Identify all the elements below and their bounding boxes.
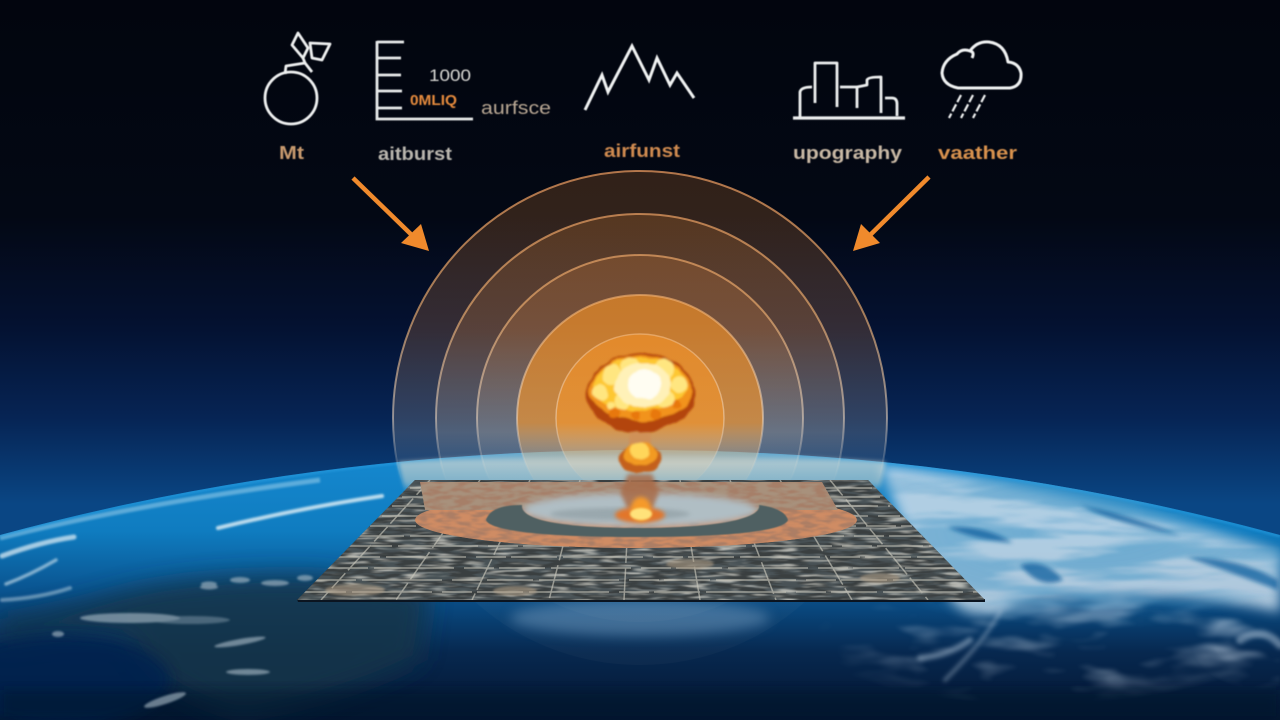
city map plane	[290, 478, 990, 602]
arrow: right, pointing to blast	[853, 177, 929, 251]
ring 3	[477, 255, 803, 581]
haze under map	[510, 600, 770, 636]
label: weather: vaather	[938, 143, 1017, 163]
damage zone: debris area	[415, 482, 857, 548]
icon: city skyline	[793, 63, 905, 118]
cloud mass, right	[880, 465, 1280, 614]
upper stem	[629, 427, 651, 445]
scale label: surface: aurfsce	[481, 98, 551, 118]
ring 2	[436, 214, 844, 622]
map edge	[297, 599, 985, 602]
cloud streaks, left	[2, 496, 382, 600]
icon: height scale	[377, 41, 473, 119]
street grid	[300, 480, 985, 600]
land mass, left	[0, 575, 430, 715]
label: Mt: Mt	[279, 143, 304, 163]
atmospheric haze band	[398, 453, 886, 490]
tan block patches	[325, 559, 900, 596]
bright limb	[0, 451, 1280, 536]
blast radius rings	[393, 171, 887, 665]
damage zone: swirl	[550, 508, 690, 520]
lower stem	[620, 474, 659, 510]
earth globe with atmosphere and clouds	[0, 440, 1280, 720]
scale value: 1000: 1000	[429, 66, 471, 85]
mid fireball	[619, 442, 661, 473]
icon: mountain	[585, 46, 694, 110]
cloud wisps	[848, 592, 1279, 694]
bottom shade	[0, 690, 1280, 720]
scale value: orange: 0MLIQ	[410, 92, 457, 109]
arrow: left, pointing to blast	[353, 178, 429, 251]
icon: bomb	[265, 33, 330, 124]
sea, lower left	[0, 635, 170, 720]
city dark blocks	[290, 478, 990, 602]
damage zone: pale inner blast	[522, 493, 758, 527]
ring 5	[556, 334, 724, 502]
horizon streak, left	[0, 480, 320, 538]
cloud gaps	[947, 505, 1278, 590]
label: airfunst: airfunst	[604, 141, 680, 161]
icon: rain cloud	[942, 42, 1021, 118]
city base	[290, 478, 990, 602]
damage zone: grey crater ring	[486, 505, 788, 537]
base fireball	[615, 497, 665, 523]
mushroom head	[586, 353, 695, 432]
city light texture	[290, 478, 990, 602]
small clouds, left	[52, 575, 313, 711]
ring 1	[393, 171, 887, 665]
dark underside	[586, 353, 695, 432]
label: topography: upography	[793, 143, 902, 163]
mushroom cloud	[586, 353, 695, 523]
ring 4	[517, 295, 763, 541]
label: airburst: aitburst	[378, 144, 452, 164]
